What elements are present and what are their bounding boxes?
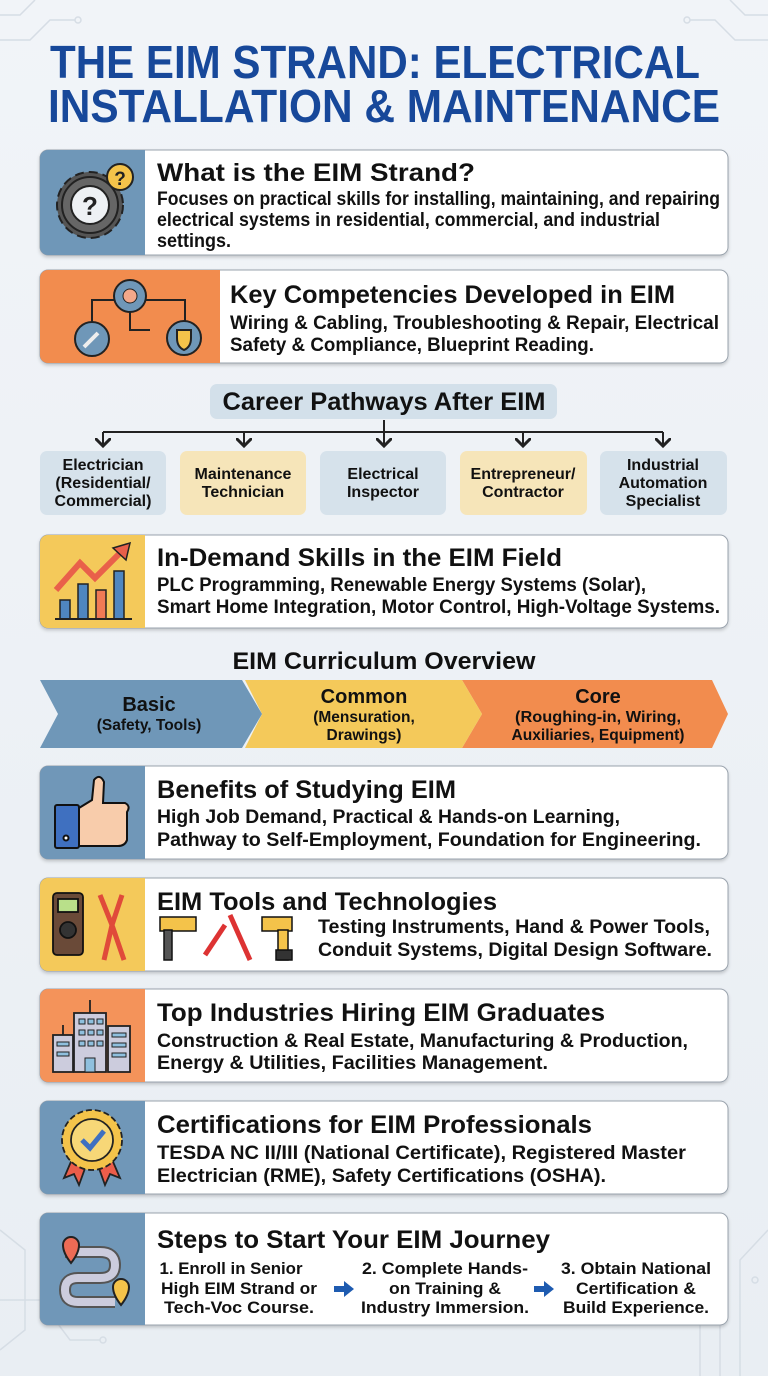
text block bbox=[157, 574, 720, 618]
career: automation specialist bbox=[600, 451, 727, 515]
heading: Steps to Start Your EIM Journey bbox=[157, 1226, 550, 1254]
career: electrician: Commercial) bbox=[55, 493, 151, 510]
heading: curriculum: EIM Curriculum Overview bbox=[232, 648, 536, 675]
career: entrepreneur: Entrepreneur/ bbox=[471, 466, 576, 483]
icon: gear question bbox=[57, 164, 133, 238]
career: entrepreneur bbox=[460, 451, 587, 515]
text block: settings. bbox=[157, 230, 231, 252]
text block bbox=[157, 188, 720, 252]
panel: steps bbox=[40, 1213, 728, 1325]
step 3: Build Experience. bbox=[563, 1298, 709, 1317]
text block: electrical systems in residential, commercial, and industrial bbox=[157, 209, 660, 231]
text block bbox=[157, 806, 701, 851]
career: maintenance technician: Technician bbox=[202, 484, 284, 501]
icon: gear question: ? bbox=[82, 191, 98, 221]
panel: benefits bbox=[40, 766, 728, 859]
icon: winding road bbox=[63, 1237, 129, 1305]
panel: tools bbox=[40, 878, 728, 971]
chevron: core bbox=[462, 680, 728, 748]
heading: EIM Tools and Technologies bbox=[157, 888, 497, 916]
step 2: on Training & bbox=[389, 1279, 501, 1298]
icon: small tools row bbox=[160, 915, 292, 960]
career: electrician: Electrician bbox=[63, 457, 143, 474]
arrow: step 2 to 3 bbox=[534, 1281, 554, 1297]
title: INSTALLATION & MAINTENANCE bbox=[48, 80, 720, 132]
heading: What is the EIM Strand? bbox=[157, 159, 475, 187]
career: electrician: (Residential/ bbox=[55, 475, 151, 492]
chevron: common: (Mensuration, bbox=[313, 709, 415, 726]
text block bbox=[157, 1030, 688, 1074]
text block bbox=[157, 1142, 686, 1187]
chevron: basic bbox=[40, 680, 262, 748]
step 3: 3. Obtain National bbox=[561, 1259, 711, 1278]
text block bbox=[230, 312, 719, 356]
career boxes bbox=[40, 451, 727, 515]
title bbox=[48, 36, 720, 132]
panel: key competencies bbox=[40, 270, 728, 363]
step 1 bbox=[160, 1259, 317, 1317]
heading: Top Industries Hiring EIM Graduates bbox=[157, 999, 605, 1027]
panel: industries bbox=[40, 989, 728, 1082]
heading: Key Competencies Developed in EIM bbox=[230, 281, 675, 309]
career: automation specialist: Industrial bbox=[627, 457, 699, 474]
chevron: core: (Roughing-in, Wiring, bbox=[515, 709, 681, 726]
career: electrical inspector: Electrical bbox=[347, 466, 419, 483]
heading: Benefits of Studying EIM bbox=[157, 776, 456, 804]
text block: Electrician (RME), Safety Certifications (OSHA). bbox=[157, 1165, 606, 1187]
icon: growth chart bbox=[55, 543, 132, 619]
career: automation specialist: Specialist bbox=[626, 493, 701, 510]
step 1: 1. Enroll in Senior bbox=[160, 1259, 303, 1278]
chevron: core: Auxiliaries, Equipment) bbox=[512, 727, 684, 744]
text block: High Job Demand, Practical & Hands-on Learning, bbox=[157, 806, 620, 828]
arrow: step 1 to 2 bbox=[334, 1281, 354, 1297]
icon: competencies network bbox=[75, 280, 201, 356]
career: maintenance technician bbox=[180, 451, 306, 515]
heading: Certifications for EIM Professionals bbox=[157, 1111, 592, 1139]
heading: In-Demand Skills in the EIM Field bbox=[157, 544, 562, 572]
step 1: Tech-Voc Course. bbox=[164, 1298, 314, 1317]
arrow: career connectors bbox=[103, 420, 663, 446]
title: THE EIM STRAND: ELECTRICAL bbox=[50, 36, 700, 88]
step 2: Industry Immersion. bbox=[361, 1298, 529, 1317]
step 2: 2. Complete Hands- bbox=[362, 1259, 528, 1278]
step 3 bbox=[561, 1259, 711, 1317]
chevron: common bbox=[245, 680, 482, 748]
icon: award badge bbox=[62, 1110, 122, 1185]
chart: curriculum chevrons bbox=[40, 680, 728, 748]
step 2 bbox=[361, 1259, 529, 1317]
text block: Conduit Systems, Digital Design Software. bbox=[318, 939, 712, 961]
icon: thumbs up bbox=[55, 777, 129, 848]
text block: Smart Home Integration, Motor Control, High-Voltage Systems. bbox=[157, 596, 720, 618]
text block: Pathway to Self-Employment, Foundation for Engineering. bbox=[157, 829, 701, 851]
chevron: basic: Basic bbox=[122, 694, 176, 716]
icon: buildings bbox=[53, 1000, 130, 1072]
text block: TESDA NC II/III (National Certificate), Registered Master bbox=[157, 1142, 686, 1164]
panel: what is EIM bbox=[40, 150, 728, 255]
text block: Safety & Compliance, Blueprint Reading. bbox=[230, 334, 594, 356]
panel: certifications bbox=[40, 1101, 728, 1194]
chevron: basic: (Safety, Tools) bbox=[97, 717, 201, 734]
text block: Energy & Utilities, Facilities Management. bbox=[157, 1052, 548, 1074]
icon: gear question: ? bbox=[114, 169, 126, 190]
career: maintenance technician: Maintenance bbox=[195, 466, 292, 483]
step 3: Certification & bbox=[576, 1279, 696, 1298]
career: electrical inspector bbox=[320, 451, 446, 515]
icon: multimeter and pliers bbox=[53, 893, 124, 960]
text block: Testing Instruments, Hand & Power Tools, bbox=[318, 916, 710, 938]
text block: Construction & Real Estate, Manufacturing & Production, bbox=[157, 1030, 688, 1052]
step 1: High EIM Strand or bbox=[161, 1279, 317, 1298]
text block: Wiring & Cabling, Troubleshooting & Repair, Electrical bbox=[230, 312, 719, 334]
career: electrical inspector: Inspector bbox=[347, 484, 419, 501]
career: entrepreneur: Contractor bbox=[482, 484, 564, 501]
chevron: common: Common bbox=[321, 686, 407, 708]
text block: PLC Programming, Renewable Energy Systems (Solar), bbox=[157, 574, 646, 596]
chevron: common: Drawings) bbox=[327, 727, 401, 744]
chevron: core: Core bbox=[575, 686, 621, 708]
panel: in-demand skills bbox=[40, 535, 728, 628]
heading: career pathways: Career Pathways After EIM bbox=[222, 388, 546, 416]
career: electrician bbox=[40, 451, 166, 515]
text block: Focuses on practical skills for installing, maintaining, and repairing bbox=[157, 188, 720, 210]
text block bbox=[318, 916, 712, 961]
career: automation specialist: Automation bbox=[619, 475, 707, 492]
